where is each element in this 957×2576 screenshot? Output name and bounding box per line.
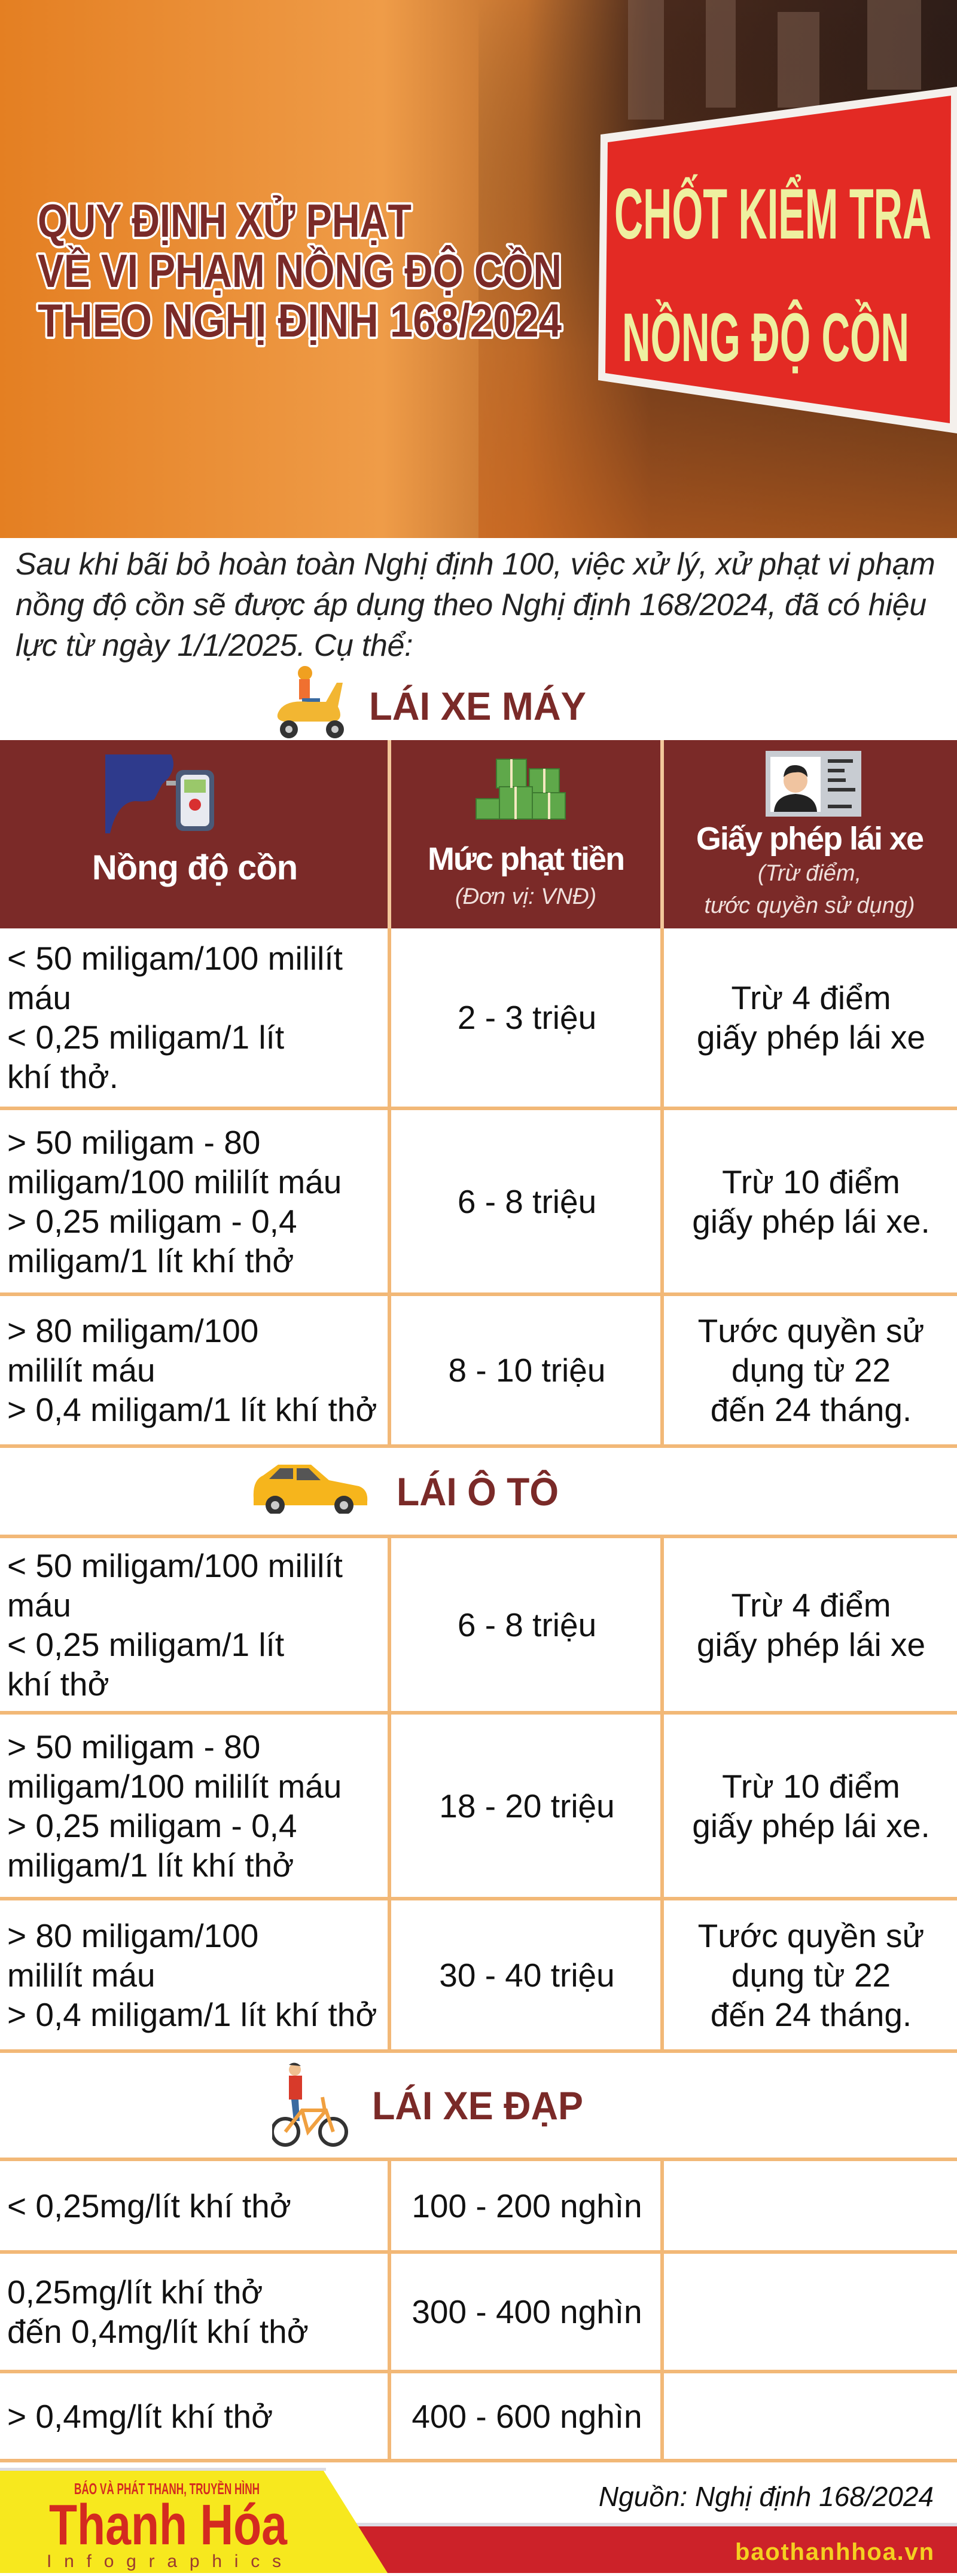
- logo block: BÁO VÀ PHÁT THANH, TRUYỀN HÌNH: [74, 2480, 260, 2498]
- table: car rows: dụng từ 22: [732, 1956, 891, 1993]
- table: motorbike rows: miligam/1 lít khí thở: [7, 1242, 294, 1279]
- table: motorbike rows: khí thở.: [7, 1058, 118, 1095]
- title: VỀ VI PHẠM NỒNG ĐỘ CỒN: [38, 245, 562, 297]
- header label: fine: [428, 841, 624, 909]
- table: car rows: < 50 miligam/100 mililít: [7, 1547, 343, 1584]
- title: THEO NGHỊ ĐỊNH 168/2024: [38, 294, 562, 347]
- table: motorbike rows: Trừ 10 điểm: [722, 1163, 900, 1200]
- table: car rows: giấy phép lái xe.: [692, 1807, 930, 1844]
- logo block: Infographics: [47, 2551, 281, 2571]
- table: bicycle rows: 100 - 200 nghìn: [412, 2187, 642, 2224]
- table: motorbike rows: 6 - 8 triệu: [458, 1182, 596, 1220]
- table: car rows: Trừ 10 điểm: [722, 1767, 900, 1804]
- table header: [0, 740, 957, 928]
- table: motorbike rows: giấy phép lái xe: [697, 1019, 925, 1056]
- table: car rows: > 50 miligam - 80: [7, 1728, 260, 1765]
- header label: concentration: Nồng độ cồn: [92, 848, 297, 887]
- heading: car: [254, 1465, 559, 1514]
- table: motorbike rows: 2 - 3 triệu: [458, 999, 596, 1036]
- icon: breathalyzer: [105, 754, 214, 833]
- sign: [598, 87, 957, 433]
- table: car rows: > 80 miligam/100: [7, 1917, 258, 1954]
- table: car rows: < 0,25 miligam/1 lít: [7, 1626, 284, 1663]
- heading: car: LÁI Ô TÔ: [397, 1469, 559, 1514]
- table: motorbike rows: > 50 miligam - 80: [7, 1124, 260, 1161]
- table: motorbike rows: dụng từ 22: [732, 1352, 891, 1389]
- header label: license: Giấy phép lái xe: [696, 821, 923, 857]
- source: Nguồn: Nghị định 168/2024: [599, 2481, 934, 2512]
- table: motorbike rows: Tước quyền sử: [698, 1312, 924, 1349]
- table: motorbike rows: 8 - 10 triệu: [449, 1352, 605, 1389]
- header label: fine: Mức phạt tiền: [428, 841, 624, 877]
- table: car rows: 30 - 40 triệu: [439, 1956, 615, 1993]
- table: motorbike rows: > 0,4 miligam/1 lít khí thở: [7, 1391, 377, 1428]
- table: car rows: đến 24 tháng.: [711, 1996, 912, 2033]
- table: bicycle rows: [0, 2158, 957, 2462]
- heading: motorbike: [278, 666, 586, 738]
- table: car rows: 6 - 8 triệu: [458, 1606, 596, 1643]
- table: bicycle rows: < 0,25mg/lít khí thở: [7, 2187, 291, 2224]
- table: car rows: miligam/100 mililít máu: [7, 1767, 342, 1804]
- table: car rows: [0, 1535, 957, 2053]
- table: car rows: > 0,4 miligam/1 lít khí thở: [7, 1996, 377, 2033]
- intro text: [16, 547, 935, 663]
- table: car rows: khí thở: [7, 1666, 109, 1703]
- table: motorbike rows: mililít máu: [7, 1352, 156, 1389]
- logo block: Thanh Hóa: [49, 2493, 287, 2557]
- table: motorbike rows: > 0,25 miligam - 0,4: [7, 1203, 297, 1240]
- header banner: [0, 0, 957, 538]
- table: car rows: mililít máu: [7, 1956, 156, 1993]
- heading: bicycle: LÁI XE ĐẠP: [372, 2083, 583, 2128]
- icon: license card: [766, 751, 861, 817]
- table: car rows: Tước quyền sử: [698, 1917, 924, 1954]
- table: bicycle rows: 300 - 400 nghìn: [412, 2293, 642, 2330]
- title: [38, 194, 562, 347]
- table: motorbike rows: > 80 miligam/100: [7, 1312, 258, 1349]
- icon: bicycle rider: [272, 2062, 346, 2145]
- table: car rows: > 0,25 miligam - 0,4: [7, 1807, 297, 1844]
- table: car rows: giấy phép lái xe: [697, 1626, 925, 1663]
- intro text: Sau khi bãi bỏ hoàn toàn Nghị định 100, việc xử lý, xử phạt vi phạm: [16, 547, 935, 582]
- table: motorbike rows: [0, 928, 957, 1448]
- title: QUY ĐỊNH XỬ PHẠT: [38, 194, 412, 247]
- intro text: lực từ ngày 1/1/2025. Cụ thể:: [16, 628, 413, 663]
- header label: license: [696, 821, 924, 918]
- heading: motorbike: LÁI XE MÁY: [369, 684, 586, 728]
- intro text: nồng độ cồn sẽ được áp dụng theo Nghị định 168/2024, đã có hiệu: [16, 588, 926, 622]
- table: bicycle rows: 400 - 600 nghìn: [412, 2397, 642, 2434]
- table: motorbike rows: < 0,25 miligam/1 lít: [7, 1019, 284, 1056]
- heading: bicycle: [272, 2062, 583, 2147]
- icon: scooter: [278, 666, 344, 738]
- website: baothanhhoa.vn: [735, 2539, 934, 2565]
- table: bicycle rows: đến 0,4mg/lít khí thở: [7, 2313, 309, 2350]
- table: motorbike rows: miligam/100 mililít máu: [7, 1163, 342, 1200]
- table: motorbike rows: Trừ 4 điểm: [731, 979, 891, 1016]
- icon: car: [254, 1465, 367, 1515]
- table: motorbike rows: < 50 miligam/100 mililít: [7, 940, 343, 977]
- table: car rows: Trừ 4 điểm: [731, 1587, 891, 1624]
- table: motorbike rows: giấy phép lái xe.: [692, 1203, 930, 1240]
- table: car rows: miligam/1 lít khí thở: [7, 1846, 294, 1883]
- logo block: [0, 2471, 388, 2573]
- header label: license: (Trừ điểm,: [758, 861, 861, 886]
- table: car rows: 18 - 20 triệu: [439, 1787, 615, 1825]
- table: bicycle rows: 0,25mg/lít khí thở: [7, 2274, 263, 2311]
- table: car rows: máu: [7, 1587, 71, 1624]
- header label: fine: (Đơn vị: VNĐ): [455, 884, 596, 909]
- table: motorbike rows: đến 24 tháng.: [711, 1391, 912, 1428]
- footer: [0, 2468, 957, 2573]
- table: bicycle rows: > 0,4mg/lít khí thở: [7, 2397, 273, 2434]
- icon: money: [476, 759, 566, 820]
- header label: license: tước quyền sử dụng): [704, 893, 915, 918]
- table: motorbike rows: máu: [7, 979, 71, 1016]
